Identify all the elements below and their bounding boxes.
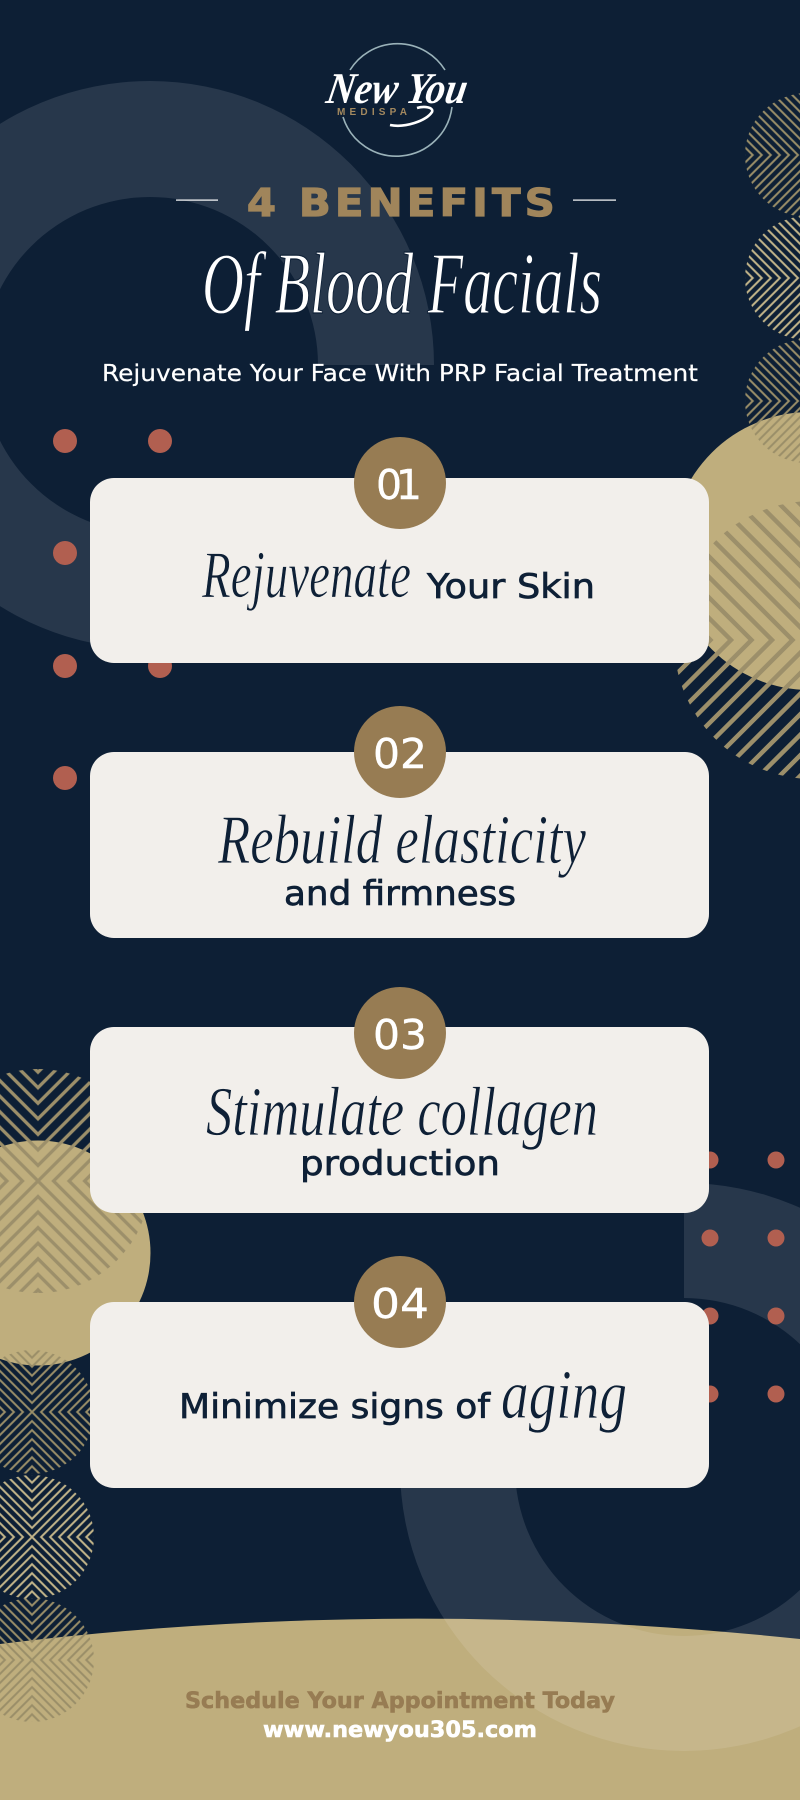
card 1 script text: Rejuvenate [201, 538, 411, 612]
logo tagline: MEDISPA [337, 107, 407, 118]
footer wave [0, 1619, 800, 1800]
card 4 [90, 1256, 709, 1488]
title script: Of Blood Facials [202, 236, 602, 333]
card 2 [90, 706, 709, 938]
patterned circle right 3 [745, 340, 800, 462]
logo swash [390, 107, 432, 126]
card 4 script text: aging [501, 1356, 627, 1433]
dots left [53, 429, 172, 790]
badge 04 [354, 1256, 446, 1348]
card 2 text: and firmness [284, 874, 516, 914]
badge 02 [354, 706, 446, 798]
card 2 script text: Rebuild elasticity [217, 801, 586, 878]
dots right [702, 1152, 784, 1402]
heading rule left [176, 200, 218, 201]
patterned circle left 2 [0, 1350, 90, 1474]
decorative ring bottom right [400, 1183, 800, 1751]
patterned circle right large [677, 502, 800, 778]
patterned circle left 3 [0, 1475, 94, 1599]
card 3 script text: Stimulate collagen [206, 1073, 598, 1150]
card 3 [90, 987, 709, 1213]
patterned circle left 4 [0, 1598, 94, 1722]
heading rule right [573, 200, 616, 201]
gold circle left [0, 1140, 150, 1366]
footer call to action: Schedule Your Appointment Today [185, 1689, 615, 1714]
card 1 text: Your Skin [426, 567, 595, 607]
badge 03 [354, 987, 446, 1079]
patterned circle right 1 [745, 93, 800, 216]
number 03: 03 [373, 1011, 427, 1059]
patterned circle right 2 [745, 216, 800, 340]
card 3 text: production [300, 1144, 500, 1184]
heading: 4 benefits: 4 BENEFITS [247, 181, 559, 226]
number 04: 04 [371, 1280, 429, 1328]
footer url: www.newyou305.com [263, 1718, 537, 1743]
subtitle: Rejuvenate Your Face With PRP Facial Treatment [102, 361, 698, 387]
logo wordmark: New You [322, 63, 472, 113]
patterned circle left large [0, 1069, 146, 1293]
badge 01 [354, 437, 446, 529]
logo [322, 44, 472, 156]
card 1 [90, 437, 709, 663]
number 02: 02 [373, 730, 427, 778]
decorative ring top left [0, 81, 434, 649]
gold circle right [671, 412, 800, 690]
card 4 text: Minimize signs of [179, 1387, 491, 1427]
number 01: 01 [376, 461, 422, 509]
